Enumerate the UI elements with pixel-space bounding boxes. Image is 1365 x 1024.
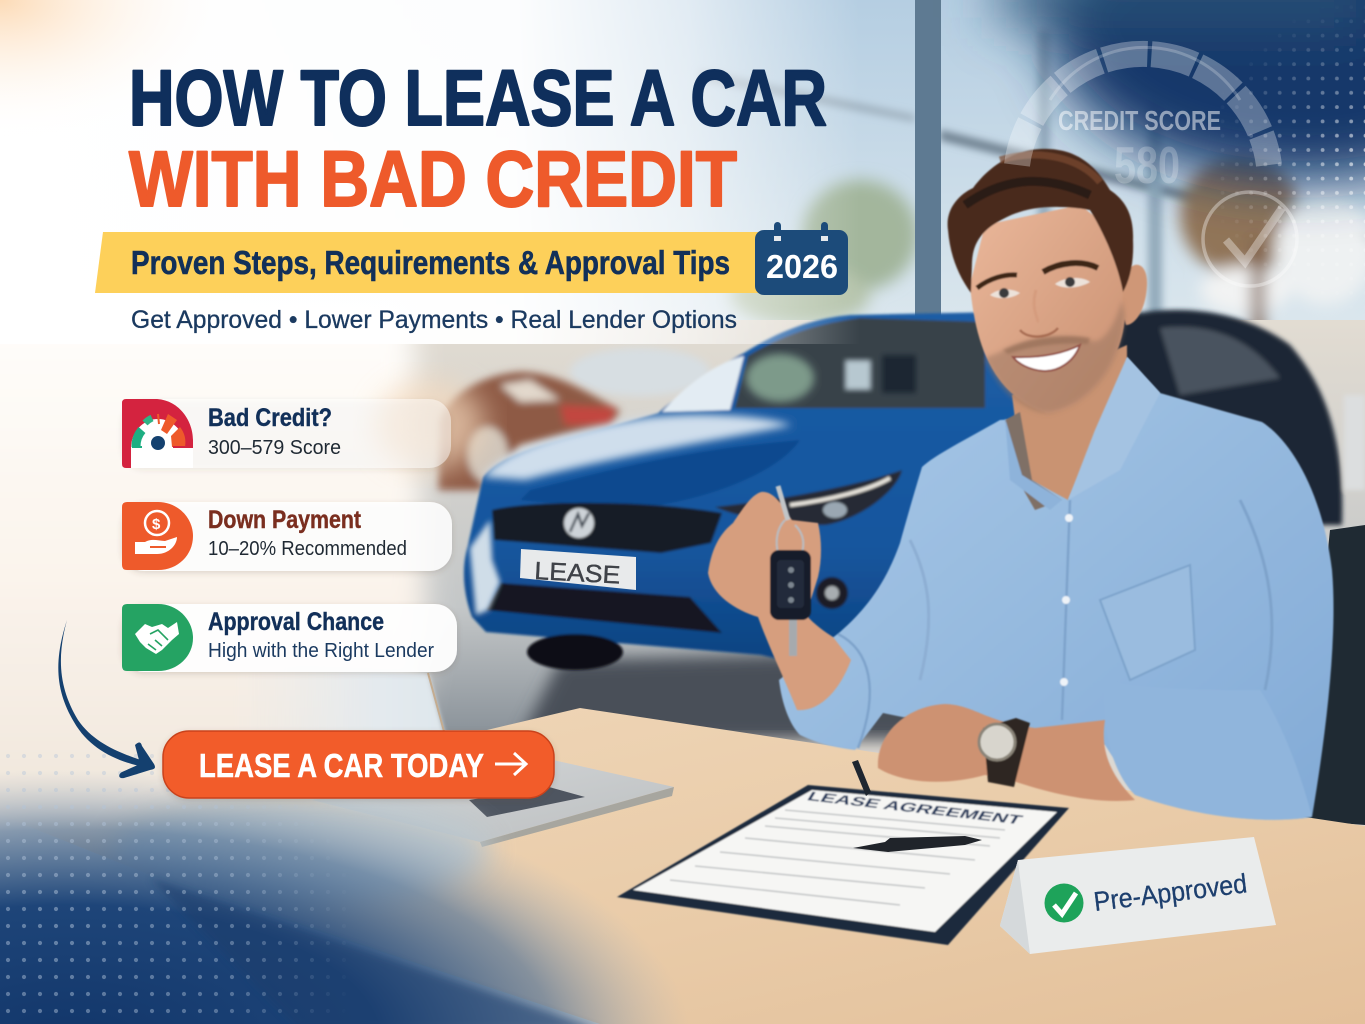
sleeve <box>1104 680 1312 820</box>
call to action button: LEASE A CAR TODAY <box>199 747 484 784</box>
ear <box>1123 265 1147 325</box>
background dark car <box>1100 310 1365 525</box>
front grille <box>492 503 722 553</box>
man: collar <box>1005 357 1160 510</box>
peach glow behind cards <box>375 380 485 470</box>
man: resting forearm and watch <box>878 704 1135 801</box>
cream fade over left side below header <box>0 300 428 850</box>
panel: top right navy corner <box>1000 0 1365 180</box>
card: bad credit <box>122 399 451 468</box>
license plate LEASE <box>520 549 636 590</box>
title <box>129 53 827 223</box>
icon: handshake <box>122 604 193 671</box>
background red car <box>438 372 620 490</box>
eyebrows <box>977 275 1017 288</box>
tyre <box>527 634 623 670</box>
curved arrow <box>58 620 155 778</box>
mustache <box>1003 336 1090 354</box>
front edge of desk <box>150 878 600 1024</box>
man: neck <box>1012 345 1127 500</box>
silver tint on desk <box>110 795 490 905</box>
car emblem <box>564 508 594 538</box>
pens <box>852 760 982 852</box>
left bumper edge <box>470 520 500 615</box>
chair <box>1300 525 1365 825</box>
card: bad credit: 300–579 Score <box>208 437 341 459</box>
ghost credit score gauge: 580 <box>1114 137 1180 195</box>
laptop <box>230 660 674 847</box>
dots: top right <box>1221 20 1365 252</box>
floor shadow under car <box>520 650 1000 740</box>
smile <box>1013 345 1080 371</box>
hair <box>948 149 1133 293</box>
arm folds <box>838 634 870 748</box>
stubble <box>985 300 1125 413</box>
calendar badge 2026 <box>755 222 848 295</box>
call to action button <box>163 731 554 798</box>
tagline: Get Approved • Lower Payments • Real Lender Options <box>131 306 737 334</box>
card: down payment <box>122 502 452 571</box>
dots: bottom left <box>6 754 330 1014</box>
right wheel <box>942 640 982 704</box>
icon: hand with coin <box>122 502 193 570</box>
pre-approved desk sign: Pre-Approved <box>1092 868 1249 917</box>
icon: credit gauge <box>122 399 193 468</box>
headlight <box>715 470 902 525</box>
pre-approved desk sign <box>1000 837 1276 954</box>
placket <box>1062 500 1070 720</box>
subtitle banner <box>95 232 760 293</box>
card: bad credit: Bad Credit? <box>208 404 332 432</box>
calendar badge 2026: 2026 <box>766 248 838 285</box>
background silver car <box>570 348 710 396</box>
ghost credit score gauge: CREDIT SCORE <box>1058 105 1221 136</box>
clipboard with lease agreement <box>617 785 1069 945</box>
card: down payment: 10–20% Recommended <box>208 538 407 560</box>
man: torso and sleeves <box>779 357 1334 820</box>
subtitle banner: Proven Steps, Requirements & Approval Tips <box>131 244 730 281</box>
chest pocket <box>1100 565 1195 680</box>
clipboard with lease agreement: LEASE AGREEMENT <box>804 789 1026 827</box>
ghost credit score gauge <box>1017 47 1269 195</box>
title: HOW TO LEASE A CAR <box>129 53 827 142</box>
nose <box>1020 328 1058 337</box>
blue car <box>464 312 1040 704</box>
title: WITH BAD CREDIT <box>129 134 737 223</box>
lower grille <box>486 583 722 633</box>
icon: hand with coin: $ <box>152 516 161 533</box>
white header band <box>0 0 860 344</box>
license plate LEASE: LEASE <box>534 557 621 589</box>
hood highlight <box>483 415 792 480</box>
top-left peach glow <box>0 0 240 140</box>
man: head <box>948 149 1147 413</box>
card: approval chance: High with the Right Lender <box>208 640 434 662</box>
bottom left navy glow <box>0 760 700 1024</box>
man: hand holding car key <box>708 486 851 710</box>
card: down payment: Down Payment <box>208 506 362 534</box>
windshield <box>662 356 744 412</box>
card: approval chance: Approval Chance <box>208 608 384 636</box>
ghost checkmark icon <box>1203 192 1297 286</box>
card: approval chance <box>122 604 457 672</box>
eyes <box>990 289 1020 298</box>
desk <box>0 708 1365 1024</box>
fog lamp <box>816 577 848 609</box>
